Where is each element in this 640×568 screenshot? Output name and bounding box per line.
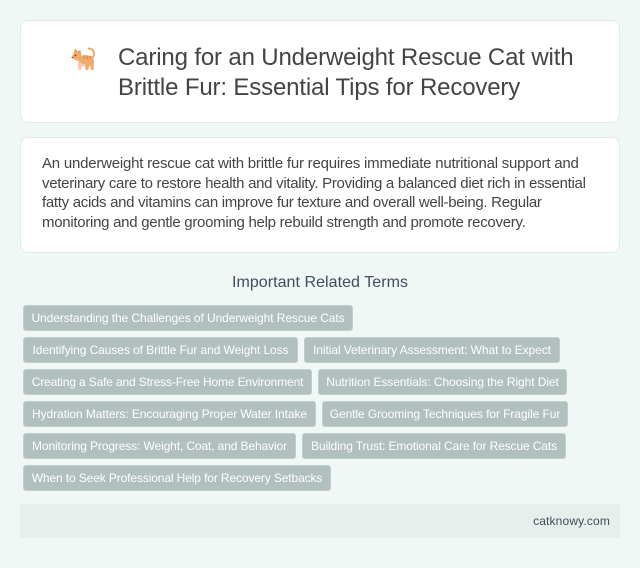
- tag: Gentle Grooming Techniques for Fragile Fur: [330, 407, 560, 421]
- tag: [23, 465, 331, 491]
- text block: introduction: monitoring and gentle grooming help rebuild strength and promote recovery.: [42, 214, 525, 230]
- tag: Nutrition Essentials: Choosing the Right Diet: [326, 375, 559, 389]
- tag: [23, 305, 353, 331]
- tag: [302, 433, 566, 459]
- text block: introduction: [42, 155, 586, 230]
- tag: [23, 433, 296, 459]
- panel: introduction: [20, 137, 620, 253]
- tag: [23, 369, 312, 395]
- heading: title: Brittle Fur: Essential Tips for Recovery: [118, 74, 520, 101]
- tag: [322, 401, 568, 427]
- text block: introduction: An underweight rescue cat with brittle fur requires immediate nutritional support and: [42, 155, 579, 172]
- tag: Building Trust: Emotional Care for Rescue Cats: [311, 439, 557, 453]
- panel: title card: [20, 20, 620, 123]
- tag: Hydration Matters: Encouraging Proper Water Intake: [32, 407, 307, 421]
- footer bar: [20, 504, 620, 538]
- tag: When to Seek Professional Help for Recovery Setbacks: [32, 471, 322, 485]
- tag: Identifying Causes of Brittle Fur and Weight Loss: [32, 343, 288, 357]
- tag list: related terms: [23, 305, 568, 491]
- tag: Creating a Safe and Stress-Free Home Environment: [32, 375, 303, 389]
- tag: Initial Veterinary Assessment: What to Expect: [313, 343, 551, 357]
- tag: [304, 337, 560, 363]
- tag: [318, 369, 567, 395]
- icon: cat: [71, 48, 95, 70]
- text block: introduction: fatty acids and vitamins can improve fur texture and overall well-being. Regular: [42, 194, 542, 211]
- tag: Understanding the Challenges of Underweight Rescue Cats: [31, 311, 345, 325]
- tag: [23, 401, 316, 427]
- heading: title: [118, 44, 573, 101]
- heading: related terms: Important Related Terms: [232, 274, 408, 291]
- tag: Monitoring Progress: Weight, Coat, and Behavior: [32, 439, 287, 453]
- heading: title: Caring for an Underweight Rescue Cat with: [118, 44, 573, 71]
- text: site name: catknowy.com: [533, 514, 610, 528]
- text block: introduction: veterinary care to restore health and vitality. Providing a balanced diet rich in essential: [42, 174, 586, 192]
- tag: [23, 337, 298, 363]
